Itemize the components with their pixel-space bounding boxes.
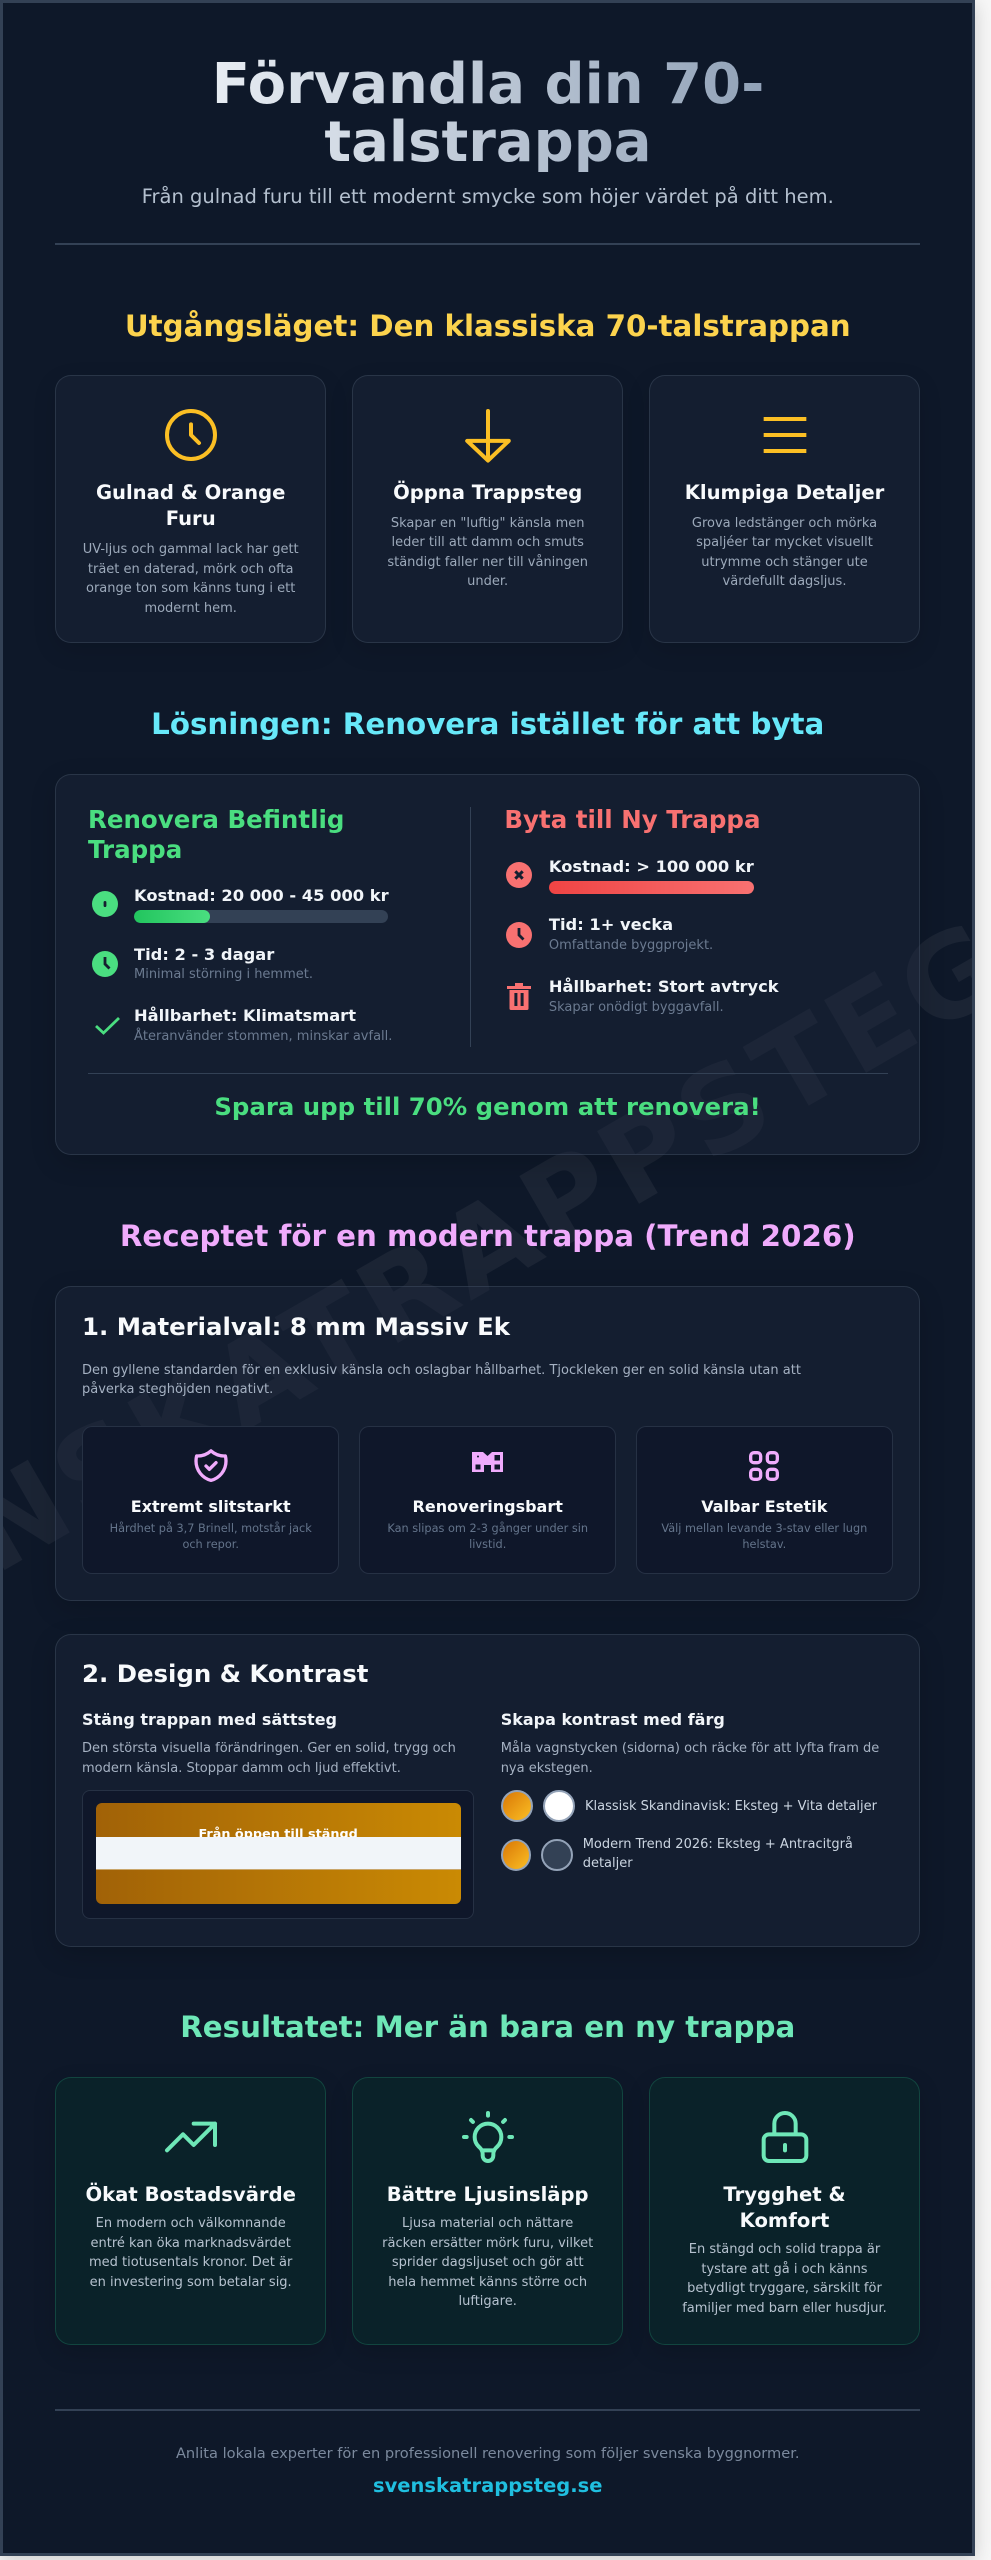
card text: en investering som betalar sig. [90,2274,292,2290]
feature text [110,1522,312,1551]
card text: räcken ersätter mörk furu, vilket [382,2236,593,2250]
card text: med tiotusentals kronor. Det är [89,2255,292,2270]
card heading: Klumpiga Detaljer [685,481,884,504]
column heading [88,804,344,864]
time note: Omfattande byggprojekt. [549,938,713,953]
text: risers: Den största visuella förändringen. Ger en solid, trygg och [82,1741,456,1756]
illustration caption: Från öppen till stängd [198,1827,358,1842]
icon: coin [92,891,118,917]
time label: Tid: 1+ vecka [549,915,673,934]
card text [692,516,877,589]
card text: sprider dagsljuset och gör att [392,2255,584,2270]
panel heading: 1. Materialval: 8 mm Massiv Ek [82,1312,510,1341]
card text: Skapar en "luftig" känsla men [391,516,585,530]
cost label: Kostnad: 20 000 - 45 000 kr [134,886,389,905]
card text: modernt hem. [144,600,237,616]
card: home value [55,2077,326,2345]
swatch: anthracite [541,1839,573,1871]
column heading: Renovera Befintlig [88,804,344,834]
savings callout: Spara upp till 70% genom att renovera! [214,1092,761,1121]
subheading: contrast: Skapa kontrast med färg [501,1710,725,1729]
icon: lock [762,2111,808,2163]
card text: familjer med barn eller husdjur. [682,2300,887,2316]
card text [83,542,299,616]
time label: Tid: 2 - 3 dagar [134,944,274,964]
swatch: oak [501,1790,533,1822]
card text: Grova ledstänger och mörka [692,516,877,530]
heading: recipe: Receptet för en modern trappa (Trend 2026) [120,1219,856,1253]
card heading: Gulnad & Orange [96,481,285,504]
swatch label: Klassisk Skandinavisk: Eksteg + Vita detaljer [585,1799,877,1814]
card text: UV-ljus och gammal lack har gett [83,542,299,557]
panel heading: 2. Design & Kontrast [82,1659,368,1688]
illustration: open to closed stairs [82,1790,474,1919]
card heading: Bättre Ljusinsläpp [387,2183,589,2206]
card heading [96,481,285,530]
card: better light [352,2077,623,2345]
feature text: Kan slipas om 2-3 gånger under sin [387,1522,588,1535]
title: Förvandla din 70- [212,52,764,117]
text: risers [82,1741,456,1776]
panel: design and contrast [55,1634,920,1947]
card text: entré kan öka marknadsvärdet [90,2236,291,2250]
card text [382,2216,593,2309]
text: contrast: nya ekstegen. [501,1761,593,1776]
heading: solution: Lösningen: Renovera istället för att byta [151,707,824,741]
card heading [723,2183,846,2232]
row: sustainability [95,1006,392,1044]
card text: En modern och välkomnande [96,2216,286,2231]
time note: Minimal störning i hemmet. [134,967,313,982]
cost bar [134,910,388,923]
text: contrast [501,1740,879,1776]
row: cost [506,856,754,894]
panel text: Den gyllene standarden för en exklusiv känsla och oslagbar hållbarhet. Tjockleken ger en solid känsla utan att [82,1363,801,1378]
icon: arrow down [465,409,511,463]
sustainability note: Skapar onödigt byggavfall. [549,1000,724,1014]
column: renovate [88,804,392,1044]
panel text [82,1362,801,1397]
column heading: Byta till Ny Trappa [504,804,760,834]
card text: hela hemmet känns större och [388,2274,587,2290]
card text: ständigt faller ner till våningen [387,554,588,570]
card text [649,2240,920,2318]
heading: result: Resultatet: Mer än bara en ny trappa [180,2010,795,2044]
subtitle: Från gulnad furu till ett modernt smycke som höjer värdet på ditt hem. [142,185,834,208]
card heading: Ökat Bostadsvärde [85,2183,296,2206]
card: open steps [352,375,623,643]
card text: En stängd och solid trappa är [689,2242,880,2257]
swatch row: classic [501,1790,877,1822]
card: yellowed pine [55,375,326,643]
feature text: livstid. [469,1538,506,1551]
sustainability label: Hållbarhet: Stort avtryck [549,976,779,996]
swatch label: Modern Trend 2026: Eksteg + Antracitgrå [583,1836,853,1852]
title: talstrappa [324,110,652,175]
sustainability label: Hållbarhet: Klimatsmart [134,1006,356,1025]
text: risers: modern känsla. Stoppar damm och ljud effektivt. [82,1761,401,1776]
row: time [506,915,713,953]
card text: träet en daterad, mörk och ofta [88,562,293,576]
swatch label: detaljer [583,1856,633,1871]
feature text: Välj mellan levande 3-stav eller lugn [661,1522,867,1535]
swatch row: modern [501,1836,853,1871]
title [200,56,776,172]
heading: starting point: Utgångsläget: Den klassiska 70-talstrappan [125,309,851,343]
icon: clock [506,922,532,948]
column heading: Trappa [88,834,182,864]
panel: renovate vs replace [55,774,920,1155]
card text: Ljusa material och nättare [402,2216,573,2231]
card text: utrymme och stänger ute [701,554,868,570]
card text: under. [467,574,508,589]
card text: luftigare. [459,2294,517,2309]
icon: four squares [749,1451,779,1481]
card text [387,516,588,589]
icon: x circle [506,862,532,888]
icon: clock [92,951,118,977]
feature text: helstav. [742,1538,786,1551]
feature text [387,1522,588,1551]
feature text [661,1522,867,1551]
card: safety [649,2077,920,2345]
swatch label [583,1836,853,1871]
card heading: Komfort [740,2209,829,2232]
feature: aesthetics [636,1426,893,1574]
card text: värdefullt dagsljus. [723,574,846,589]
icon: clock [165,409,217,461]
row: time [92,944,313,982]
panel text: påverka steghöjden negativt. [82,1382,273,1397]
swatch: white [543,1790,575,1822]
feature text: och repor. [182,1538,239,1551]
subheading: risers: Stäng trappan med sättsteg [82,1710,337,1729]
feature heading: Extremt slitstarkt [131,1497,291,1516]
card text: betydligt tryggare, särskilt för [687,2281,882,2296]
footer text: Anlita lokala experter för en professionell renovering som följer svenska byggnormer. [176,2445,800,2462]
column: replace [504,804,779,1014]
card text [89,2216,292,2290]
text: contrast: Måla vagnstycken (sidorna) och räcke för att lyfta fram de [501,1741,879,1756]
card text: orange ton som känns tung i ett [86,581,295,596]
footer link: svenskatrappsteg.se [373,2474,603,2497]
feature: durable [82,1426,339,1574]
card text: tystare att gå i och känns [701,2262,868,2276]
card heading: Öppna Trappsteg [393,481,582,504]
icon: blocks [472,1452,503,1472]
card heading: Furu [166,507,216,530]
swatch: oak [501,1839,531,1871]
card heading: Trygghet & [723,2183,846,2206]
card: clunky details [649,375,920,643]
icon: check [95,1017,120,1035]
icon: shield check [194,1449,228,1482]
feature text: Hårdhet på 3,7 Brinell, motstår jack [110,1522,312,1535]
icon: trending up [164,2122,218,2152]
sustainability note: Återanvänder stommen, minskar avfall. [134,1029,392,1044]
row: cost [92,886,389,923]
feature heading: Valbar Estetik [701,1497,827,1516]
row: sustainability [507,976,779,1014]
cost label: Kostnad: > 100 000 kr [549,856,754,876]
feature: renovatable [359,1426,616,1574]
card text: leder till att damm och smuts [391,535,584,550]
icon: menu lines [764,417,806,453]
icon: trash [507,983,531,1010]
cost bar [549,881,754,894]
panel: material choice [55,1286,920,1600]
icon: light bulb [462,2111,514,2163]
card text: spaljéer tar mycket visuellt [696,535,873,550]
riser band [96,1837,461,1870]
feature heading: Renoveringsbart [413,1497,563,1516]
